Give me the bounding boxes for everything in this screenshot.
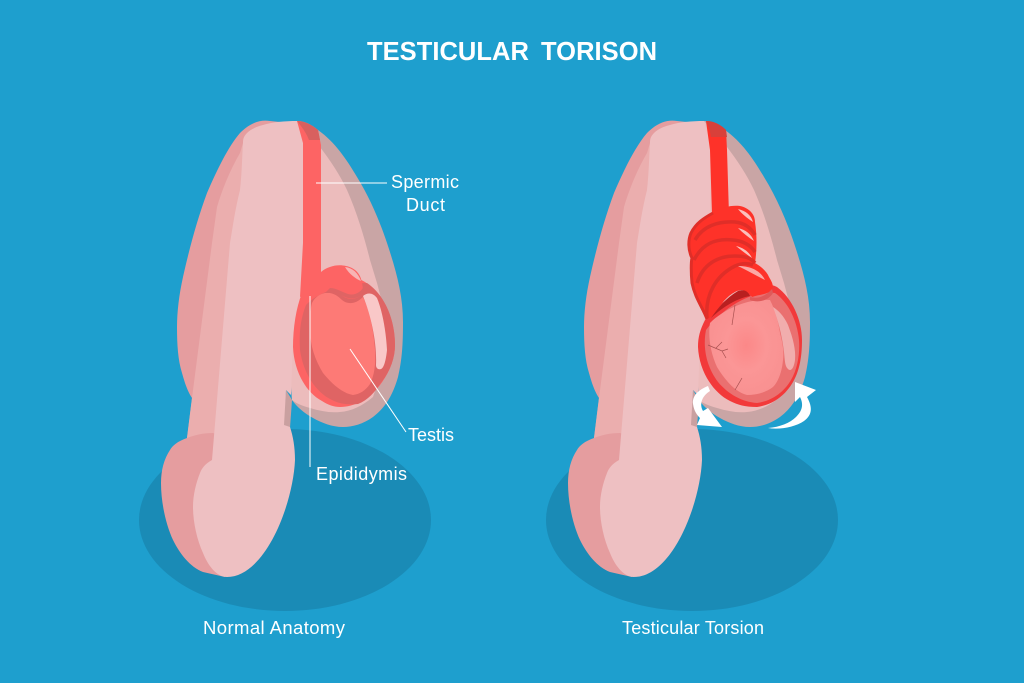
twisted cord coils	[689, 206, 773, 319]
back of penis	[584, 121, 687, 450]
epididymis cap	[302, 265, 363, 299]
label: testis	[350, 349, 454, 445]
glans side	[568, 433, 637, 577]
tunica shaded ring	[705, 293, 799, 403]
label: testis: Testis	[408, 425, 454, 445]
testis body	[310, 293, 375, 395]
left arrow	[693, 386, 722, 427]
tunica shaded ring	[300, 283, 395, 404]
coil mass	[689, 206, 773, 319]
spermic duct	[706, 121, 729, 215]
shadow ellipse	[139, 429, 431, 611]
caption: testicular torsion: Testicular Torsion	[622, 618, 764, 638]
testis	[698, 285, 802, 407]
rotation arrows	[693, 382, 816, 429]
lower fold	[750, 289, 773, 301]
spermic duct	[297, 121, 321, 297]
testis body	[709, 300, 783, 395]
scrotum shell	[285, 121, 403, 427]
glans side	[161, 433, 230, 577]
coil shadow stripes	[694, 222, 755, 318]
right arrow	[768, 382, 816, 429]
panel: normal anatomy	[139, 121, 459, 638]
caption: normal anatomy: Normal Anatomy	[203, 617, 346, 638]
title: TESTICULAR TORISON	[367, 38, 657, 66]
front of penis	[193, 121, 303, 577]
coil rim	[689, 213, 713, 319]
shadow ellipse	[546, 429, 838, 611]
label: spermic duct	[316, 172, 459, 215]
scrotum inner	[285, 121, 392, 412]
highlight	[773, 307, 795, 370]
front of penis	[600, 121, 710, 577]
notch under shaft	[690, 390, 699, 428]
side of shaft	[187, 143, 245, 470]
highlight	[363, 294, 387, 369]
scrotum shell	[692, 121, 810, 427]
tunica outer	[293, 276, 395, 407]
scrotum inner	[692, 121, 799, 412]
label: spermic duct: Duct	[406, 195, 445, 215]
testis	[293, 265, 395, 407]
side of shaft	[594, 143, 652, 470]
veins	[708, 305, 742, 390]
label: epididymis: Epididymis	[316, 464, 407, 484]
coil highlights	[736, 209, 754, 258]
panel: testicular torsion	[546, 121, 838, 638]
back of penis	[177, 121, 280, 450]
label: spermic duct: Spermic	[391, 172, 459, 192]
dark hollow	[711, 290, 750, 318]
notch under shaft	[283, 390, 292, 428]
tunica outer	[698, 285, 802, 407]
